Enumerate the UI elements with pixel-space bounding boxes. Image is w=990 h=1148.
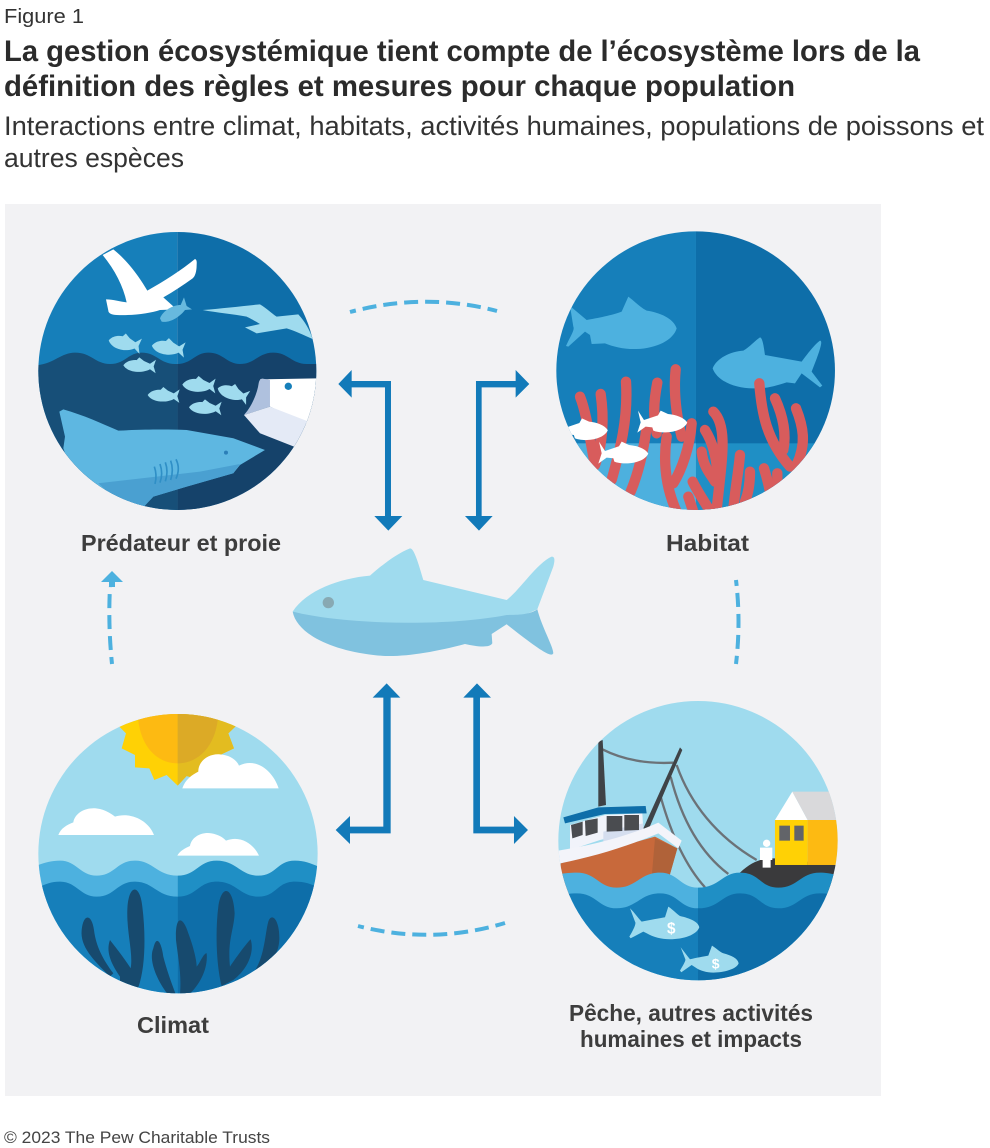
circle: fishing and human activities xyxy=(553,697,843,990)
label: fishing and human impacts: humaines et impacts xyxy=(580,1026,802,1052)
icon: fish with dollar: $ xyxy=(667,921,676,938)
subtitle: autres espèces xyxy=(4,143,184,173)
icon: sun xyxy=(119,707,236,786)
dashed arc: top xyxy=(350,302,497,312)
icon: harbour with house xyxy=(740,792,841,893)
seaweed xyxy=(82,890,279,995)
white fish trio xyxy=(559,411,687,464)
arrow: climate to central fish xyxy=(336,683,400,844)
icon: central fish xyxy=(293,548,554,656)
clouds xyxy=(58,754,279,856)
label: climate: Climat xyxy=(137,1012,209,1038)
icon: fish with dollar xyxy=(680,946,739,973)
coral xyxy=(580,369,803,513)
circle: habitat xyxy=(553,227,839,517)
dashed arrow: climate to predator xyxy=(101,571,123,664)
label: habitat: Habitat xyxy=(666,530,749,556)
title: définition des règles et mesures pour chaque population xyxy=(4,70,795,103)
circle: climate xyxy=(33,707,323,1000)
circle: predator and prey xyxy=(33,227,321,517)
icon: fishing boat xyxy=(558,740,682,897)
icon: nets and rigging xyxy=(602,749,757,887)
icon: distant bird xyxy=(203,304,313,339)
waves and water xyxy=(562,872,834,980)
title xyxy=(4,35,920,103)
arrow: habitat to central fish xyxy=(465,370,529,531)
subtitle: Interactions entre climat, habitats, activités humaines, populations de poissons et xyxy=(4,111,984,141)
dashed arc: bottom xyxy=(358,923,505,935)
icon: shark xyxy=(59,409,265,507)
figure number: Figure 1 xyxy=(4,6,84,28)
waves and water xyxy=(33,861,323,1000)
icon: fish with dollar: $ xyxy=(712,956,720,972)
label: fishing and human impacts xyxy=(569,1000,813,1052)
panel: diagram background xyxy=(5,204,881,1096)
icon: fish with dollar xyxy=(629,907,699,939)
arrow: predator and prey to central fish xyxy=(338,370,402,531)
icon: big fish mouth xyxy=(244,378,317,447)
arrow: fishing to central fish xyxy=(463,683,528,844)
icon: white seagull xyxy=(103,249,197,315)
copyright: © 2023 The Pew Charitable Trusts xyxy=(4,1128,270,1147)
label: fishing and human impacts: Pêche, autres activités xyxy=(569,1000,813,1026)
label: predator and prey: Prédateur et proie xyxy=(81,530,281,556)
subtitle xyxy=(4,111,984,173)
icon: fish left xyxy=(566,297,677,349)
dashed arc: right xyxy=(736,580,738,664)
fish school xyxy=(107,331,251,415)
icon: fish right xyxy=(713,337,822,388)
title: La gestion écosystémique tient compte de l’écosystème lors de la xyxy=(4,35,920,68)
icon: caught fish xyxy=(160,297,192,322)
